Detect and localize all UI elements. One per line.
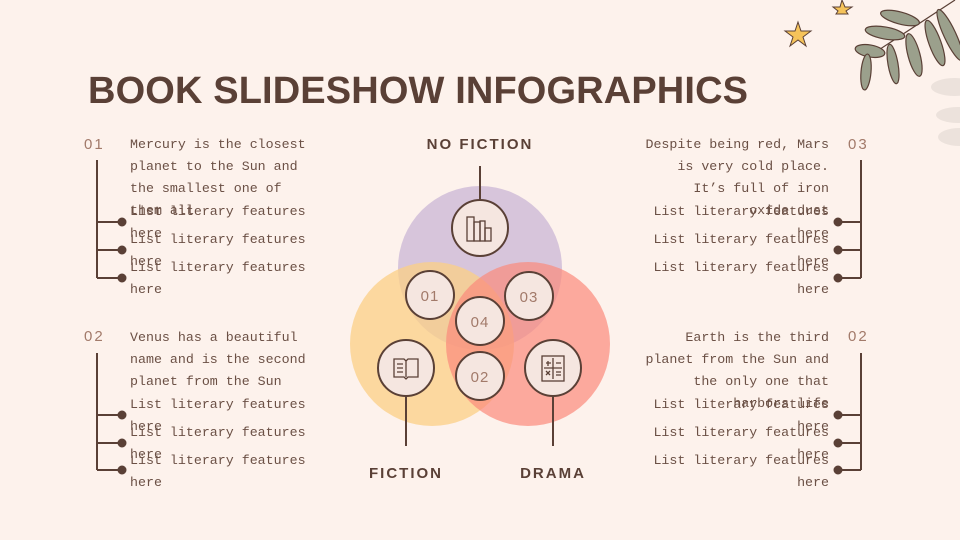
panel: 02 left bottom: here — [130, 419, 162, 434]
description: Mercury is the closest — [130, 137, 306, 152]
panel: 03 right top: here — [797, 282, 829, 297]
panel: 02 right bottom: here — [797, 447, 829, 462]
panel: 02 left bottom: 02 — [84, 328, 105, 345]
panel: 02 right bottom: 02 — [848, 328, 869, 345]
panel: 02 left bottom — [84, 328, 306, 490]
panel: 01 left top: List literary features — [130, 260, 306, 275]
venn diagram: 01 — [421, 288, 439, 305]
venn diagram: FICTION — [369, 465, 443, 482]
list items: List literary features — [130, 204, 306, 219]
panel: 02 right bottom: List literary features — [653, 453, 829, 468]
description — [130, 137, 306, 218]
panel: 02 left bottom: List literary features — [130, 453, 306, 468]
panel: 02 left bottom: planet from the Sun — [130, 374, 282, 389]
description: the smallest one of — [130, 181, 282, 196]
panel: 03 right top: Despite being red, Mars — [645, 137, 829, 152]
panel: 03 right top: 03 — [848, 136, 869, 153]
panel: 03 right top: is very cold place. — [677, 159, 829, 174]
panel: 02 right bottom — [645, 328, 869, 490]
panel: 02 left bottom: name and is the second — [130, 352, 306, 367]
panel: 03 right top: List literary features — [653, 232, 829, 247]
list items: here — [130, 226, 162, 241]
venn diagram: NO FICTION — [427, 136, 533, 153]
panel: 02 right bottom: here — [797, 419, 829, 434]
panel: 02 right bottom: Earth is the third — [685, 330, 829, 345]
panel: 02 right bottom: List literary features — [653, 397, 829, 412]
venn diagram: 03 — [520, 289, 538, 306]
panel: 02 left bottom: Venus has a beautiful — [130, 330, 298, 345]
panel: 02 left bottom: List literary features — [130, 397, 306, 412]
panel: 01 left top: here — [130, 254, 162, 269]
panel: 02 right bottom: the only one that — [693, 374, 829, 389]
panel: 03 right top: List literary features — [653, 204, 829, 219]
panel: 03 right top: It’s full of iron — [693, 181, 829, 196]
panel: 02 right bottom: List literary features — [653, 425, 829, 440]
panel: 02 right bottom: planet from the Sun and — [645, 352, 829, 367]
panel: 02 left bottom: List literary features — [130, 425, 306, 440]
title: BOOK SLIDESHOW INFOGRAPHICS — [88, 70, 748, 112]
panel: 02 left bottom: here — [130, 447, 162, 462]
panel: 02 right bottom: here — [797, 475, 829, 490]
panel: 03 right top: oxide dust — [749, 203, 829, 218]
list items — [130, 204, 306, 241]
panel: 03 right top: here — [797, 254, 829, 269]
panel: 01 left top — [84, 136, 306, 297]
description: planet to the Sun and — [130, 159, 298, 174]
panel: 01 left top: List literary features — [130, 232, 306, 247]
panel: 01 left top: here — [130, 282, 162, 297]
panel: 03 right top: here — [797, 226, 829, 241]
panel: 02 left bottom: here — [130, 475, 162, 490]
panel: 03 right top: List literary features — [653, 260, 829, 275]
venn diagram: 02 — [471, 369, 489, 386]
number 01: 01 — [84, 136, 105, 153]
venn diagram: 04 — [471, 314, 489, 331]
venn diagram: DRAMA — [520, 465, 586, 482]
panel: 03 right top — [645, 136, 869, 297]
description: them all — [130, 203, 194, 218]
panel: 02 right bottom: harbors life — [733, 396, 829, 411]
